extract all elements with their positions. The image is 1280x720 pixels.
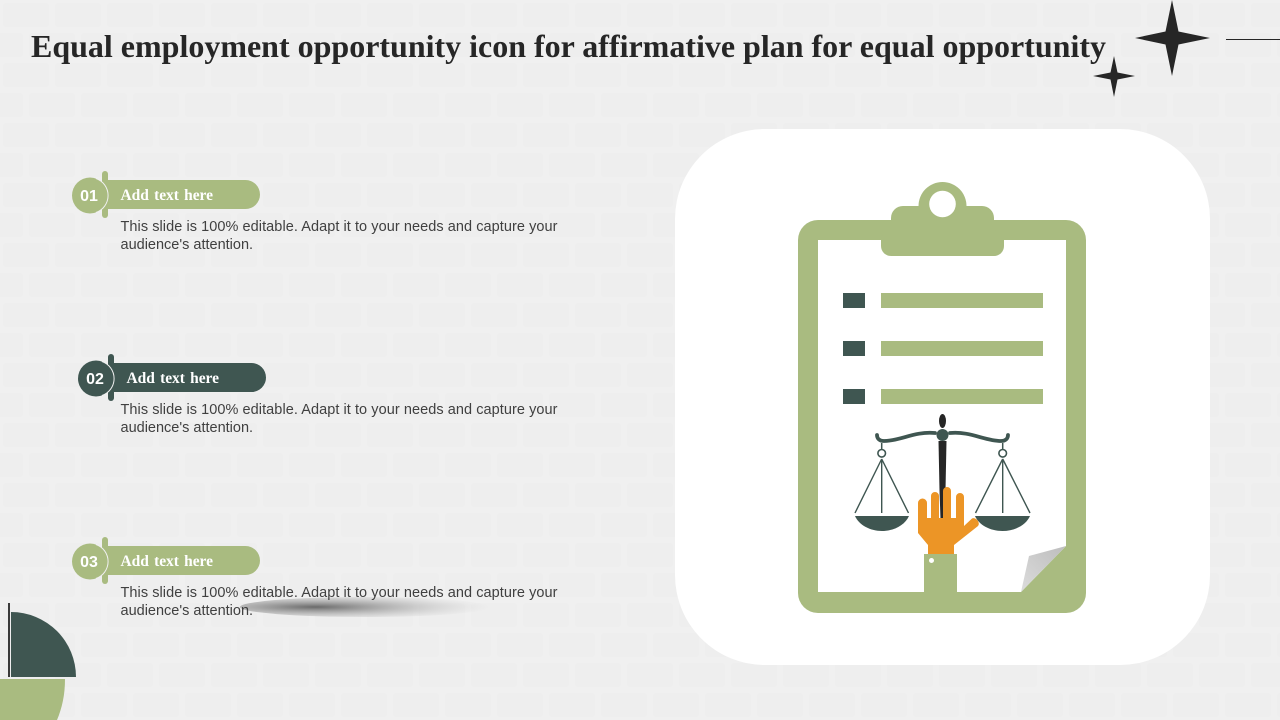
- description 02: audience's attention.: [120, 420, 253, 436]
- label pill 01: [72, 171, 260, 218]
- label pill 02: Add text here: [126, 370, 219, 387]
- paper sheet: [818, 240, 1066, 592]
- sleeve: [924, 554, 957, 592]
- clipboard board: [798, 220, 1086, 613]
- label pill 01: 01: [80, 188, 98, 205]
- clip: [881, 182, 1004, 256]
- folded corner: [1021, 546, 1066, 592]
- description 02: This slide is 100% editable. Adapt it to your needs and capture your: [120, 402, 558, 418]
- item 01: [72, 171, 558, 253]
- label pill 02: [78, 354, 266, 401]
- description 01: audience's attention.: [120, 237, 253, 253]
- label pill 03: [72, 537, 260, 584]
- description 03: audience's attention.: [120, 603, 253, 619]
- icon: small star: [1093, 56, 1135, 97]
- drop shadow: [240, 597, 490, 617]
- title: Equal employment opportunity icon for affirmative plan for equal opportunity: [31, 28, 1106, 64]
- label pill 03: 03: [80, 554, 98, 571]
- corner decoration: [0, 603, 76, 720]
- description 01: This slide is 100% editable. Adapt it to your needs and capture your: [120, 219, 558, 235]
- label pill 01: Add text here: [120, 187, 213, 204]
- item 02: [78, 354, 558, 436]
- icon: balance scale: [855, 414, 1030, 531]
- panel: white icon card: [675, 129, 1210, 665]
- icon: clipboard: [798, 182, 1086, 613]
- item 03: [72, 537, 558, 619]
- description 03: This slide is 100% editable. Adapt it to your needs and capture your: [120, 585, 558, 601]
- checklist: [843, 293, 1043, 404]
- label pill 03: Add text here: [120, 553, 213, 570]
- icon: large star: [1135, 0, 1210, 76]
- label pill 02: 02: [86, 371, 104, 388]
- header rule: [1226, 39, 1280, 40]
- icon: orange hand: [918, 487, 979, 554]
